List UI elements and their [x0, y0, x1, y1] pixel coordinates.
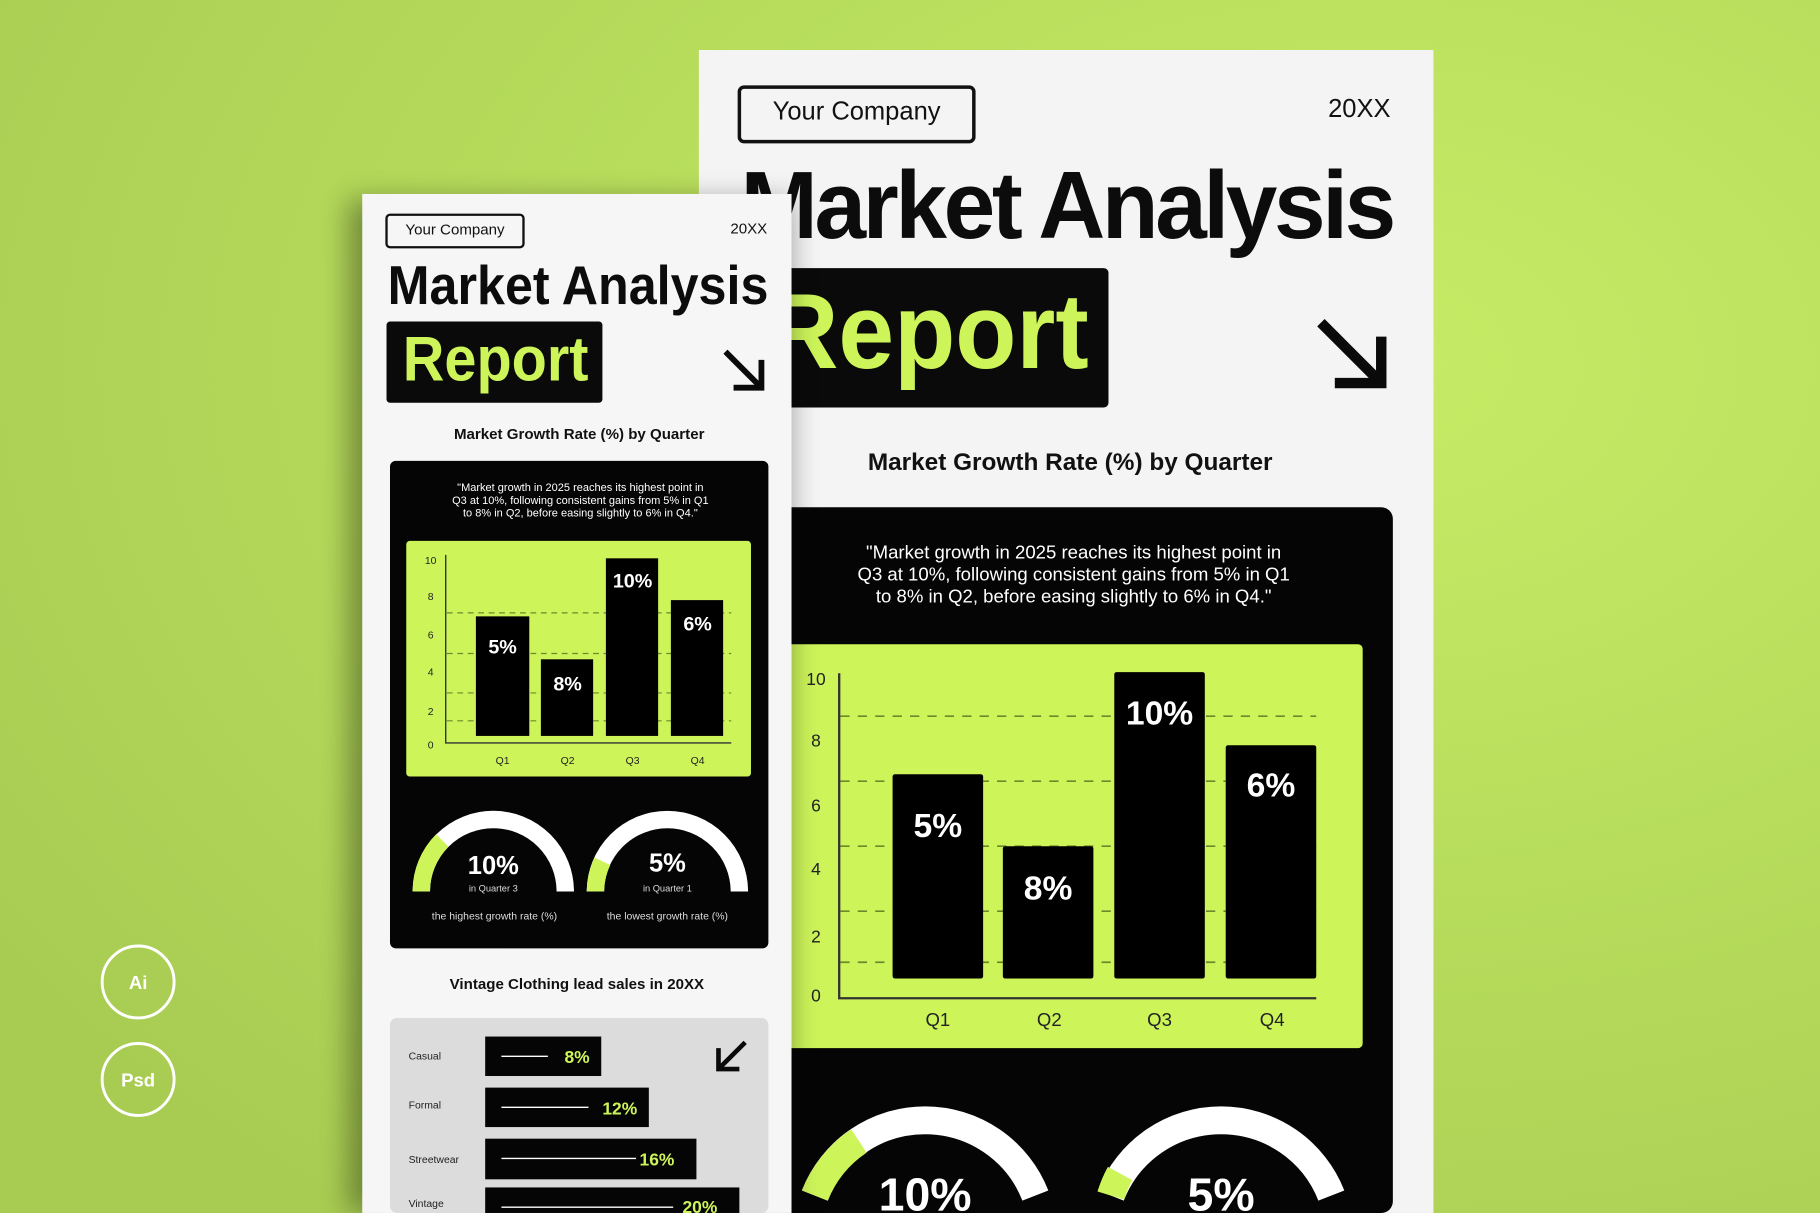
- big bar chart: 8%: [1024, 871, 1073, 908]
- big arrow: [1321, 323, 1381, 383]
- small bar chart: 10%: [613, 570, 653, 592]
- big quote: Q3 at 10%, following consistent gains from 5% in Q1: [858, 563, 1290, 584]
- Psd badge: Psd: [121, 1069, 155, 1090]
- small bar chart: Q4: [691, 756, 705, 767]
- Ai badge: [102, 946, 174, 1018]
- small year: 20XX: [730, 220, 767, 237]
- small bar chart: 6: [428, 630, 434, 641]
- small bar chart: 8: [428, 592, 434, 603]
- sales panel: Vintage: [409, 1199, 444, 1210]
- sales panel: 12%: [602, 1098, 638, 1118]
- small bar chart: 2: [428, 707, 434, 718]
- small bar chart: Q1: [496, 756, 510, 767]
- big bar chart: 6: [811, 795, 821, 815]
- small gauge 10%: 10%: [468, 852, 519, 880]
- big bar chart: Q1: [925, 1009, 950, 1030]
- sales panel: Casual: [409, 1052, 441, 1063]
- sales panel: [390, 1018, 768, 1213]
- small arrow: [725, 352, 761, 388]
- small gauge 5%: the lowest growth rate (%): [607, 911, 728, 922]
- small bar chart: 4: [428, 668, 434, 679]
- small subtitle 2: Vintage Clothing lead sales in 20XX: [450, 976, 704, 993]
- big company badge: Your Company: [773, 98, 941, 126]
- Ai badge: Ai: [129, 972, 147, 993]
- big bar chart: 0: [811, 986, 821, 1006]
- sales panel: Formal: [409, 1101, 441, 1112]
- small gauge 10%: the highest growth rate (%): [432, 911, 557, 922]
- big bar chart: Q2: [1037, 1009, 1062, 1030]
- big bar chart: 2: [811, 927, 821, 947]
- big title: Market Analysis: [741, 153, 1393, 259]
- big gauge 10%: [815, 1120, 1035, 1213]
- big bar chart: 6%: [1247, 767, 1295, 804]
- big bar chart: 4: [811, 859, 821, 879]
- big quote: "Market growth in 2025 reaches its highest point in: [866, 541, 1281, 562]
- sales panel: 8%: [564, 1047, 590, 1067]
- small gauge 10%: [421, 819, 565, 922]
- small bar chart: [406, 541, 751, 777]
- sales panel: Streetwear: [409, 1155, 460, 1166]
- big gauge 5%: [1111, 1120, 1331, 1213]
- small bar chart: 6%: [683, 613, 712, 635]
- small bar chart: Q3: [626, 756, 640, 767]
- small bar chart: 8%: [553, 674, 582, 696]
- big bar chart: 10%: [1126, 695, 1193, 732]
- small quote: Q3 at 10%, following consistent gains from 5% in Q1: [452, 495, 709, 507]
- small company badge: [387, 215, 523, 247]
- big bar chart: Q3: [1147, 1009, 1172, 1030]
- small quote: to 8% in Q2, before easing slightly to 6% in Q4.": [463, 508, 698, 520]
- small page: [362, 194, 792, 1213]
- sales panel: 16%: [640, 1149, 675, 1169]
- small quote: "Market growth in 2025 reaches its highest point in: [457, 482, 704, 494]
- small title: Market Analysis: [388, 255, 768, 316]
- big company badge: [739, 87, 974, 142]
- small gauge 5%: 5%: [649, 850, 686, 878]
- small report box: Report: [403, 325, 589, 395]
- big quote: to 8% in Q2, before easing slightly to 6% in Q4.": [876, 585, 1271, 606]
- small gauge 5%: in Quarter 1: [643, 883, 692, 893]
- sales arrow: [718, 1042, 745, 1069]
- big black panel: [743, 507, 1393, 1213]
- small company badge: Your Company: [405, 221, 505, 238]
- big bar chart: [766, 644, 1363, 1048]
- small bar chart: 0: [428, 741, 434, 752]
- big year: 20XX: [1328, 95, 1391, 123]
- small black panel: [390, 461, 768, 948]
- big report box: Report: [766, 271, 1089, 391]
- big bar chart: Q4: [1260, 1009, 1285, 1030]
- big bar chart: 10: [806, 669, 826, 689]
- Psd badge: [102, 1044, 174, 1115]
- small gauge 5%: [595, 820, 739, 922]
- big bar chart: 5%: [914, 808, 962, 845]
- big bar chart: 8: [811, 730, 821, 750]
- small bar chart: 5%: [488, 637, 517, 659]
- small bar chart: Q2: [561, 756, 575, 767]
- small quote: [452, 482, 709, 520]
- big page: [699, 50, 1433, 1213]
- small gauge 10%: in Quarter 3: [469, 883, 518, 893]
- small subtitle: Market Growth Rate (%) by Quarter: [454, 426, 705, 443]
- small bar chart: 10: [425, 556, 437, 567]
- big quote: [858, 541, 1290, 606]
- big subtitle: Market Growth Rate (%) by Quarter: [868, 449, 1273, 476]
